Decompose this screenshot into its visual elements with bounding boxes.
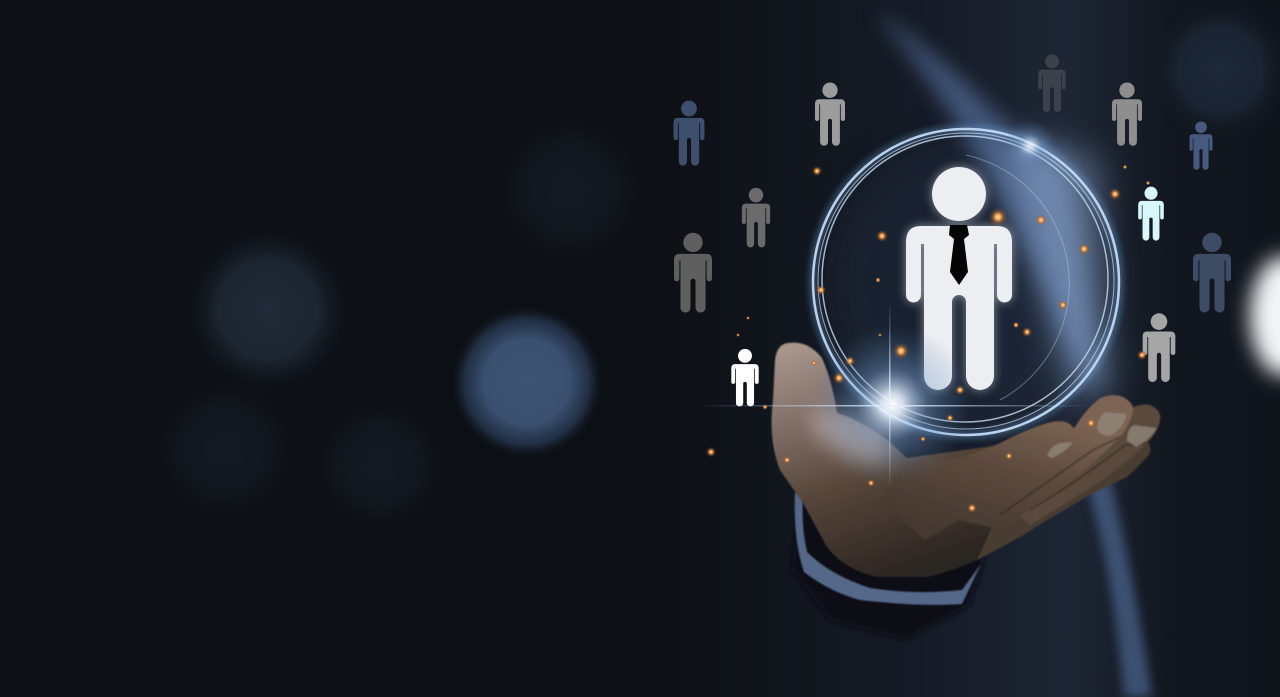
- lens flare: [700, 120, 1090, 490]
- circle inner tint: [826, 142, 1106, 422]
- person white: [731, 349, 759, 406]
- person small blue: [1190, 121, 1212, 170]
- person navy large: [1193, 233, 1231, 313]
- person cyan white: [1138, 187, 1164, 241]
- surrounding people icons: [674, 54, 1231, 406]
- little finger: [977, 440, 1150, 560]
- central person icon: [906, 167, 1012, 390]
- rings: [813, 129, 1119, 435]
- person mid grey: [742, 188, 770, 247]
- palm and thumb: [772, 343, 1050, 577]
- person light grey: [1143, 313, 1175, 382]
- bokeh lights: [145, 0, 1280, 540]
- person blue: [674, 101, 704, 166]
- sleeve: [792, 490, 985, 640]
- orange sparks: [706, 164, 1150, 513]
- ring finger: [1000, 405, 1160, 525]
- middle finger: [960, 395, 1133, 530]
- thumb highlight: [802, 398, 898, 474]
- lapel light stripe: [875, 10, 1152, 697]
- necktie: [949, 225, 969, 285]
- index finger: [880, 421, 1075, 540]
- fingernails: [1047, 412, 1157, 458]
- finger creases: [1000, 437, 1146, 515]
- person dark grey large: [674, 233, 712, 313]
- person grey right: [1112, 83, 1142, 146]
- right edge light: [1250, 256, 1280, 376]
- cuff: [795, 492, 981, 605]
- suit body: [640, 0, 1280, 697]
- person dark top: [1038, 54, 1066, 112]
- person grey top: [815, 83, 845, 146]
- hand: [772, 343, 1160, 577]
